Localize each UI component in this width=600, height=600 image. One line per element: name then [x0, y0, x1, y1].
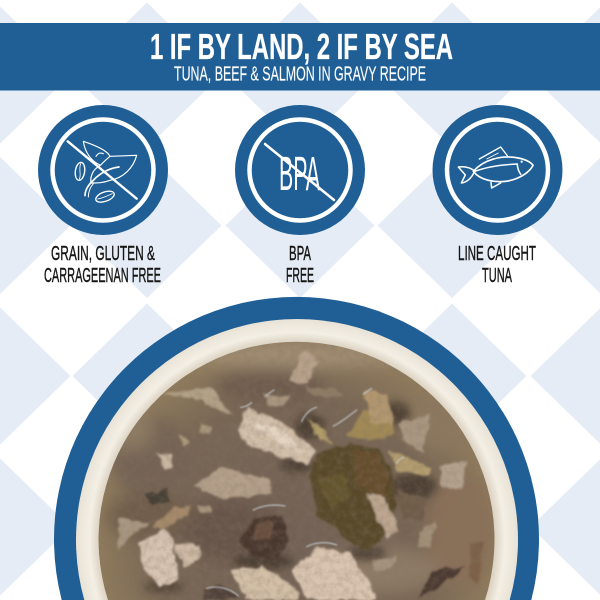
pink left chunks	[138, 528, 178, 587]
label: grain, gluten and carrageenan free: CARRAGEENAN FREE	[44, 265, 161, 287]
brown round piece	[240, 517, 288, 561]
label: line caught tuna: LINE CAUGHT	[458, 243, 536, 265]
label: BPA free: BPA	[289, 243, 311, 265]
food texture	[98, 356, 461, 600]
bottom chunks	[230, 567, 298, 600]
label: grain, gluten and carrageenan free: GRAIN, GLUTEN &	[51, 243, 155, 265]
dark small clump	[147, 490, 171, 504]
icon: BPA free	[235, 105, 365, 235]
shreds	[163, 387, 232, 415]
icon: grain, gluten and carrageenan free	[38, 105, 168, 235]
label: line caught tuna: TUNA	[482, 265, 512, 287]
gravy highlights	[207, 388, 403, 596]
bowl rim	[76, 319, 518, 600]
cream sliver	[367, 493, 401, 538]
icon: BPA free: BPA	[279, 148, 320, 201]
food photo	[97, 340, 497, 600]
beef dark center	[310, 443, 397, 552]
icon: line caught tuna	[432, 105, 562, 235]
yellow flakes	[347, 407, 395, 442]
subtitle: TUNA, BEEF & SALMON IN GRAVY RECIPE	[174, 62, 426, 86]
label: line caught tuna	[458, 243, 536, 287]
right chunks	[400, 413, 430, 453]
header banner	[0, 23, 600, 90]
bowl of food	[54, 297, 539, 600]
blue ring behind bowl	[54, 297, 539, 600]
shadows beneath pieces	[143, 402, 437, 592]
tuna chunk	[237, 407, 317, 463]
label: BPA free	[286, 243, 314, 287]
label: grain, gluten and carrageenan free	[44, 243, 161, 287]
brown shred	[418, 567, 465, 598]
title: 1 IF BY LAND, 2 IF BY SEA	[150, 26, 453, 67]
label: BPA free: FREE	[286, 265, 314, 287]
mid chunk	[193, 467, 272, 499]
